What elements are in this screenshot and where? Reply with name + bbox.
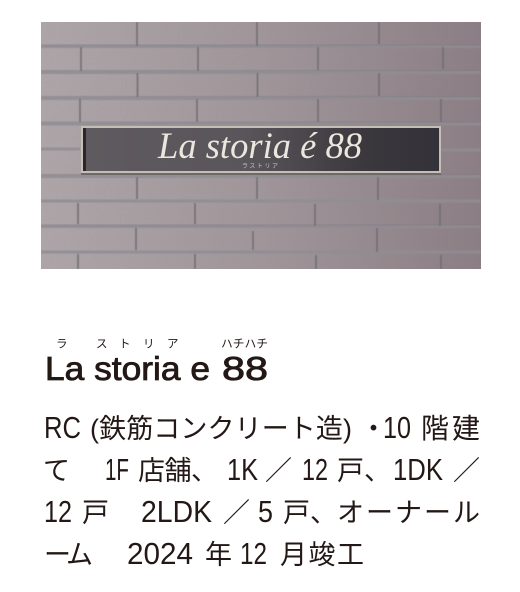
- line 3: 5: [258, 494, 273, 529]
- line 3: 12: [44, 494, 72, 529]
- line 4: ーム: [44, 540, 93, 570]
- line 4: 月竣工: [280, 540, 364, 570]
- infographic canvas: [41, 22, 481, 566]
- furigana: ス: [96, 338, 108, 350]
- title text: 88: [222, 350, 268, 387]
- line 2: 店舗、: [138, 456, 218, 486]
- line 3: ／: [223, 498, 250, 528]
- furigana: ラ: [56, 338, 68, 350]
- plate katakana: ラストリア: [242, 163, 278, 170]
- line 4: 年: [205, 540, 232, 570]
- line 1: ・: [360, 414, 387, 444]
- line 2: て: [43, 456, 70, 486]
- line 3: 戸、: [283, 498, 337, 528]
- furigana: [56, 338, 268, 350]
- line 3: オーナール: [337, 498, 480, 528]
- name plate: [81, 126, 441, 175]
- line 4: 2024: [127, 536, 193, 571]
- furigana: ア: [167, 338, 178, 350]
- line 2: 12: [302, 452, 328, 487]
- description text: [43, 410, 480, 571]
- line 2: ／: [265, 456, 292, 486]
- furigana: リ: [143, 338, 154, 350]
- title text: La storia e: [45, 350, 210, 387]
- line 3: 2LDK: [141, 494, 212, 529]
- line 2: 戸、: [337, 456, 391, 486]
- line 4: 12: [240, 536, 267, 571]
- furigana: ト: [119, 338, 130, 350]
- plate lettering: La storia é 88: [157, 126, 362, 167]
- line 2: 1DK: [393, 452, 443, 487]
- brick wall: [41, 22, 481, 269]
- line 2: 1F: [105, 452, 129, 487]
- furigana: ハチハチ: [221, 338, 268, 350]
- line 1: (鉄筋コンクリート造): [90, 414, 352, 444]
- line 2: ／: [453, 456, 480, 486]
- title with furigana: [45, 338, 268, 387]
- line 3: 戸: [82, 498, 109, 528]
- line 1: 10: [383, 410, 411, 445]
- line 1: RC: [44, 410, 81, 445]
- line 1: 階建: [421, 413, 480, 444]
- photo: brick wall with name plate: [41, 22, 481, 269]
- line 2: 1K: [227, 452, 258, 487]
